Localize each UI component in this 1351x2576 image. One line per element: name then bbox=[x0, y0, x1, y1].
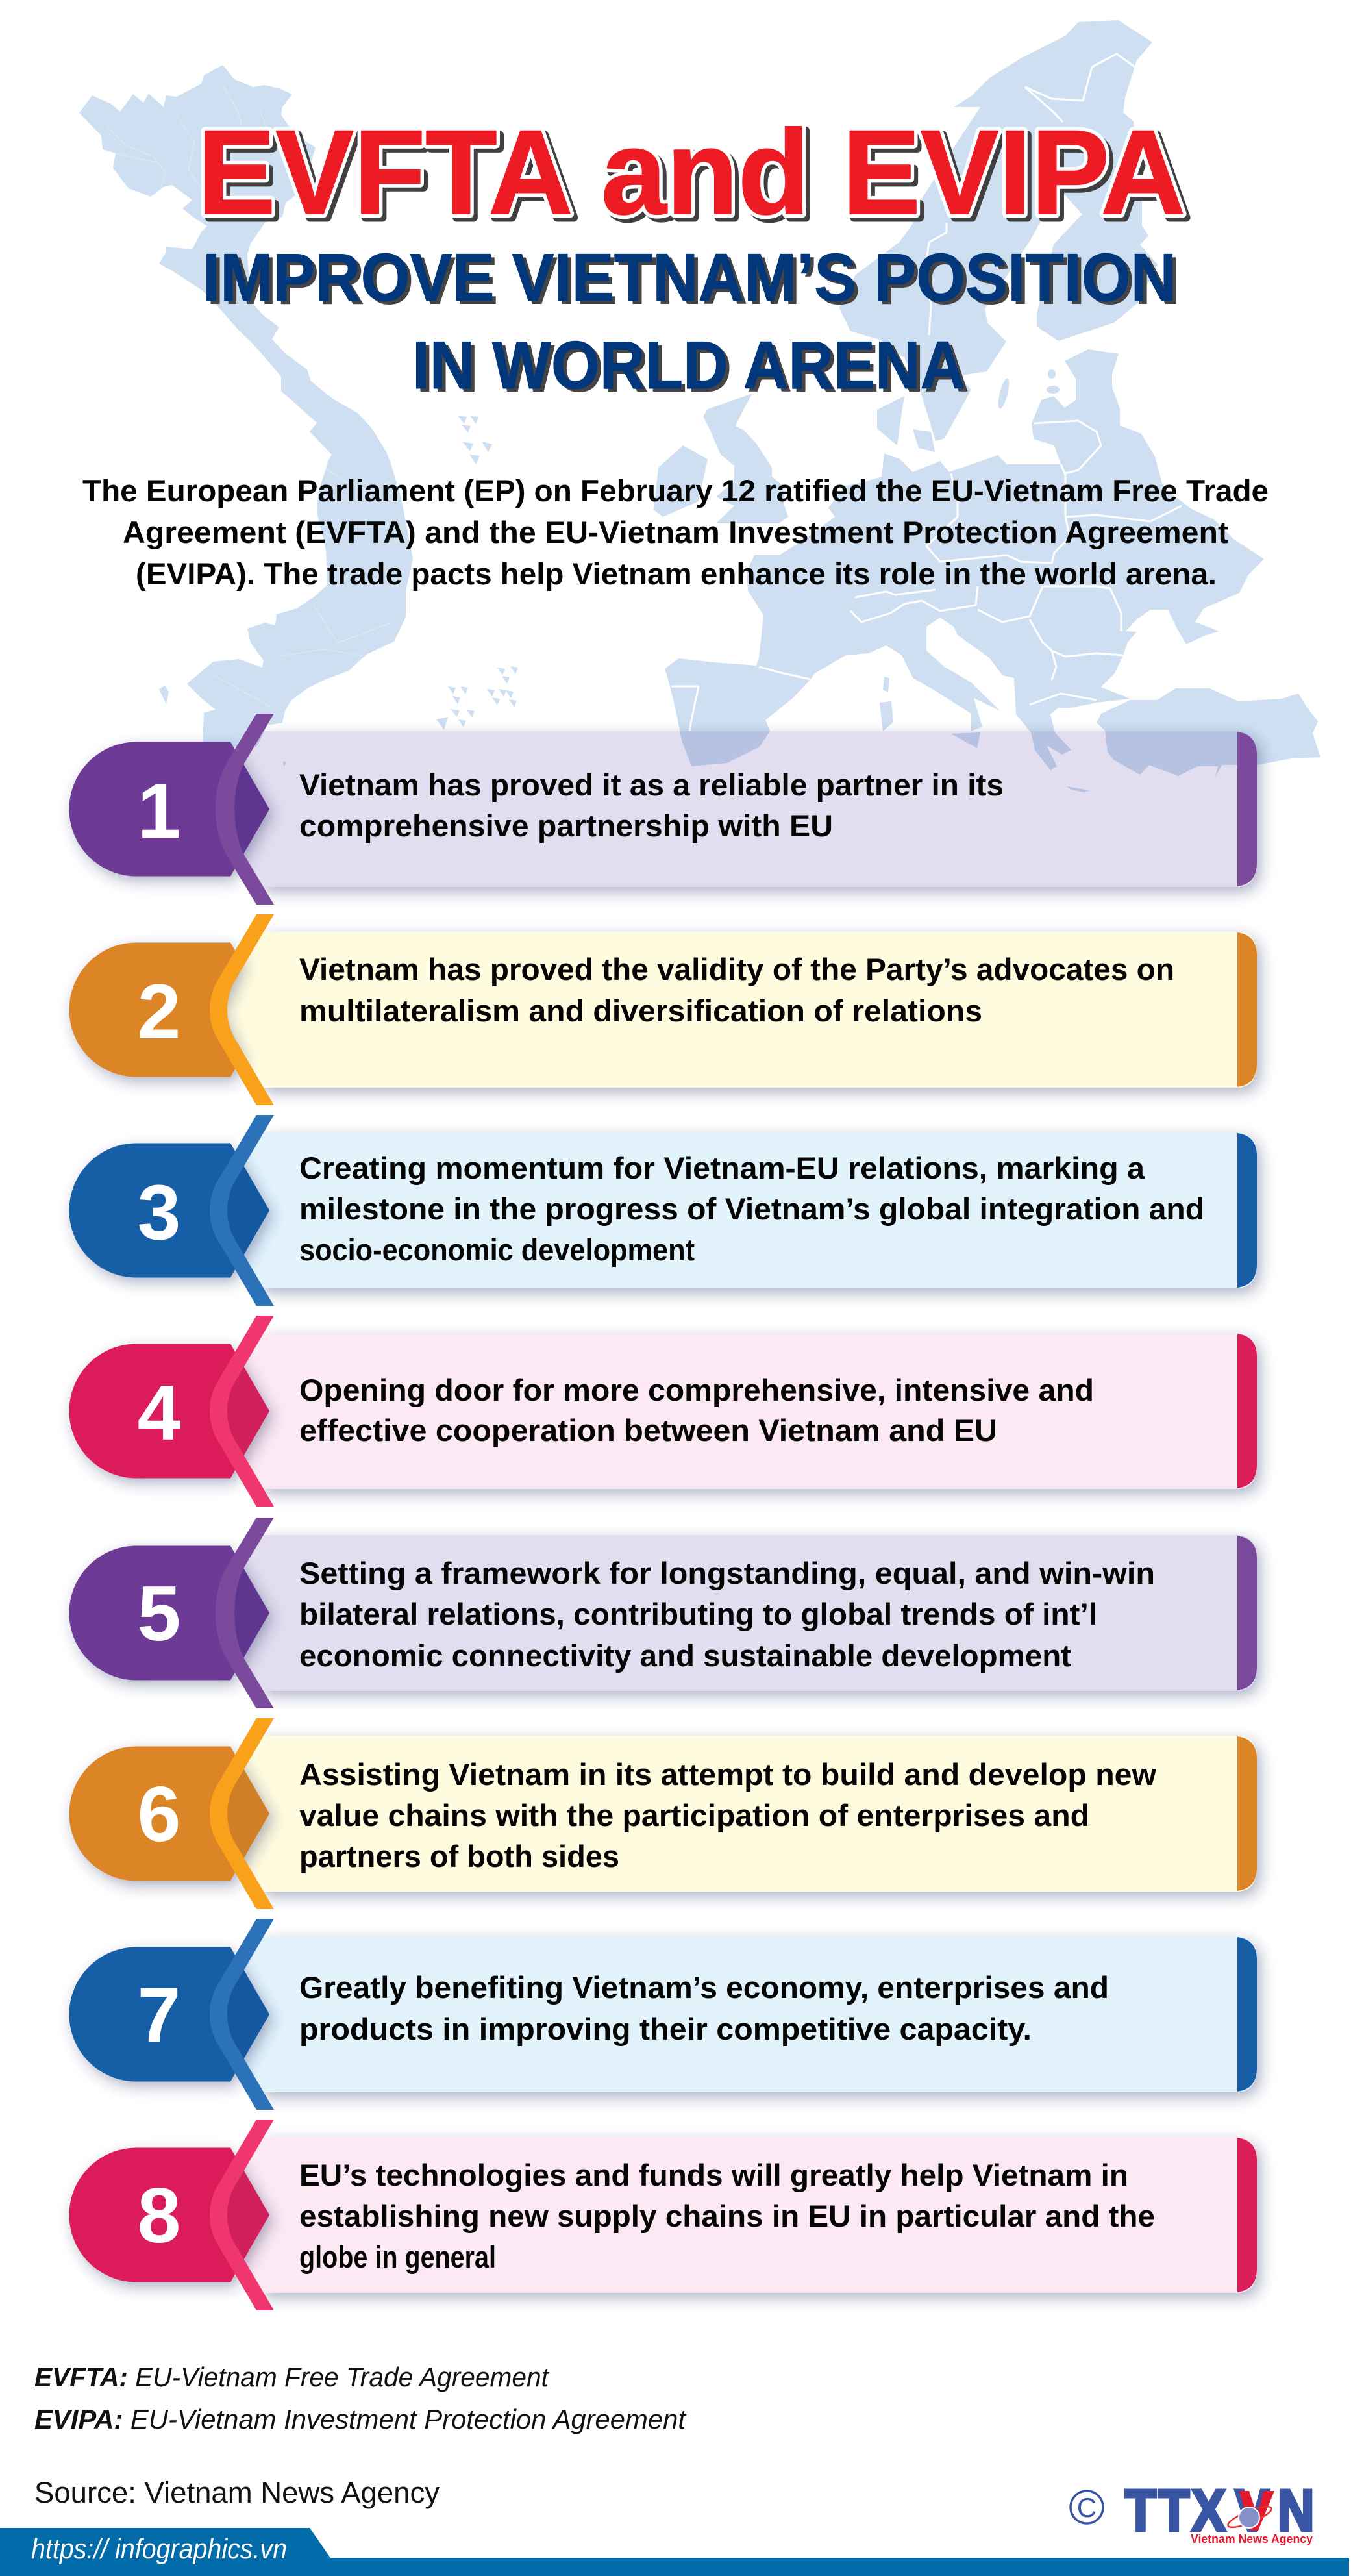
item 3 text: Creating momentum for Vietnam-EU relations, marking a bbox=[299, 1151, 1145, 1185]
subtitle: improve Vietnam's position in world arena: IN WORLD ARENA bbox=[412, 328, 965, 403]
item 3 text: milestone in the progress of Vietnam’s global integration and bbox=[299, 1192, 1204, 1226]
item 6 chevron bbox=[210, 1718, 274, 1909]
item 8 text: globe in general bbox=[299, 2240, 496, 2274]
item 7 bbox=[69, 1919, 1257, 2110]
item 7 text bbox=[299, 1970, 1109, 2046]
item 3 text bbox=[299, 1151, 1204, 1267]
item 1 text: comprehensive partnership with EU bbox=[299, 808, 833, 843]
item 3 text: socio-economic development bbox=[299, 1232, 695, 1267]
item 3 right accent bbox=[1237, 1133, 1257, 1288]
item 6 text bbox=[299, 1757, 1156, 1873]
item 4 bbox=[69, 1316, 1257, 1507]
subtitle: improve Vietnam's position in world arena bbox=[203, 240, 1180, 406]
abbreviations note bbox=[34, 2362, 687, 2434]
item 2 card bbox=[224, 932, 1257, 1088]
logo: copyright symbol bbox=[1071, 2491, 1103, 2523]
item 4 text bbox=[299, 1373, 1094, 1447]
item 1 number tab bbox=[69, 742, 269, 877]
intro paragraph: Agreement (EVFTA) and the EU-Vietnam Investment Protection Agreement bbox=[123, 515, 1228, 549]
item 3 chevron bbox=[210, 1115, 274, 1306]
item 8 number: 8 bbox=[138, 2172, 180, 2259]
item 7 text: products in improving their competitive capacity. bbox=[299, 2012, 1032, 2046]
map: Paracel and Spratly islands bbox=[436, 416, 518, 730]
item 6 card bbox=[232, 1736, 1257, 1892]
item 3 number: 3 bbox=[138, 1169, 180, 1256]
abbreviations note: EVFTA: EU-Vietnam Free Trade Agreement bbox=[34, 2362, 550, 2392]
item 1 card bbox=[232, 731, 1257, 887]
item 2 chevron bbox=[210, 914, 274, 1105]
item 5 chevron bbox=[216, 1518, 274, 1708]
item 2 bbox=[69, 914, 1257, 1105]
map: Con Dao islet bbox=[283, 761, 286, 767]
intro paragraph bbox=[82, 473, 1269, 591]
item 1 text: Vietnam has proved it as a reliable partner in its bbox=[299, 768, 1004, 802]
item 1 bbox=[69, 714, 1257, 905]
item 1 chevron bbox=[216, 714, 274, 905]
item 4 number: 4 bbox=[138, 1369, 181, 1457]
item 1 text bbox=[299, 768, 1004, 843]
title: EVFTA and EVIPA: EVFTA and EVIPA bbox=[197, 106, 1185, 240]
item 2 text: multilateralism and diversification of relations bbox=[299, 994, 982, 1028]
item 4 chevron bbox=[210, 1316, 274, 1507]
item 6 text: partners of both sides bbox=[299, 1839, 619, 1873]
intro paragraph: (EVIPA). The trade pacts help Vietnam enhance its role in the world arena. bbox=[136, 556, 1217, 591]
item 8 text bbox=[299, 2158, 1155, 2274]
item 5 card bbox=[232, 1535, 1257, 1691]
item 6 number tab bbox=[69, 1747, 269, 1881]
item 2 text bbox=[299, 952, 1174, 1028]
item 7 chevron bbox=[210, 1919, 274, 2110]
background map: Vietnam and Europe bbox=[79, 20, 1320, 792]
map: Turkey and Crete bbox=[1067, 688, 1320, 792]
item 5 text: economic connectivity and sustainable development bbox=[299, 1638, 1071, 1673]
item 1 right accent bbox=[1237, 732, 1257, 886]
logo: TTXVN Vietnam News Agency: Vietnam News Agency bbox=[1191, 2532, 1313, 2545]
item 5 text: bilateral relations, contributing to global trends of int’l bbox=[299, 1597, 1097, 1631]
item 7 card bbox=[232, 1936, 1257, 2092]
item 7 text: Greatly benefiting Vietnam’s economy, enterprises and bbox=[299, 1970, 1109, 2005]
map: Scandinavia and Finland bbox=[839, 20, 1158, 441]
item 8 text: EU’s technologies and funds will greatly help Vietnam in bbox=[299, 2158, 1128, 2192]
item 4 text: effective cooperation between Vietnam and EU bbox=[299, 1413, 997, 1447]
item 8 tab tip bbox=[221, 2164, 269, 2266]
item 8 chevron bbox=[210, 2120, 274, 2310]
subtitle: improve Vietnam's position in world arena: IMPROVE VIETNAM’S POSITION bbox=[206, 244, 1180, 319]
subtitle: improve Vietnam's position in world arena: IMPROVE VIETNAM’S POSITION bbox=[203, 240, 1176, 316]
item 8 bbox=[69, 2120, 1257, 2310]
item 3 tab tip bbox=[221, 1160, 269, 1261]
item 6 bbox=[69, 1718, 1257, 1909]
logo: TTXVN Vietnam News Agency: TTXVN bbox=[1125, 2478, 1314, 2543]
title: EVFTA and EVIPA: EVFTA and EVIPA bbox=[201, 110, 1189, 244]
item 5 text: Setting a framework for longstanding, equal, and win-win bbox=[299, 1556, 1155, 1590]
map: Denmark bbox=[877, 396, 935, 452]
footer bar with URL bbox=[0, 2528, 1349, 2576]
item 3 number tab bbox=[69, 1143, 269, 1278]
title: EVFTA and EVIPA: EVFTA and EVIPA bbox=[197, 106, 1185, 240]
item 4 text: Opening door for more comprehensive, intensive and bbox=[299, 1373, 1094, 1407]
map: Britain and Ireland bbox=[654, 394, 788, 523]
item 8 text: establishing new supply chains in EU in particular and the bbox=[299, 2199, 1155, 2233]
item 6 number: 6 bbox=[138, 1771, 180, 1858]
item 8 number tab bbox=[69, 2148, 269, 2282]
item 8 card bbox=[232, 2137, 1257, 2293]
item 3 card bbox=[232, 1132, 1257, 1288]
item 7 tab tip bbox=[221, 1964, 269, 2065]
item 4 card bbox=[232, 1333, 1257, 1489]
item 5 number tab bbox=[69, 1545, 269, 1681]
footer bar with URL: https:// infographics.vn bbox=[31, 2533, 287, 2565]
item 6 right accent bbox=[1237, 1736, 1257, 1891]
item 7 number tab bbox=[69, 1947, 269, 2082]
item 5 number: 5 bbox=[138, 1570, 180, 1657]
item 7 right accent bbox=[1237, 1937, 1257, 2092]
item 2 number tab bbox=[69, 943, 242, 1077]
item 5 text bbox=[299, 1556, 1155, 1673]
item 1 number: 1 bbox=[138, 768, 180, 855]
item 5 tab tip bbox=[221, 1562, 269, 1664]
item 3 bbox=[69, 1115, 1257, 1306]
item 4 number tab bbox=[69, 1344, 269, 1478]
item 2 right accent bbox=[1237, 932, 1257, 1087]
item 6 text: value chains with the participation of enterprises and bbox=[299, 1798, 1089, 1832]
logo: copyright symbol: C bbox=[1077, 2492, 1097, 2523]
item 4 tab tip bbox=[221, 1360, 269, 1462]
item 5 right accent bbox=[1237, 1536, 1257, 1690]
item 6 tab tip bbox=[221, 1763, 269, 1864]
item 4 right accent bbox=[1237, 1334, 1257, 1488]
item 8 right accent bbox=[1237, 2138, 1257, 2292]
map: Vietnam bbox=[79, 65, 413, 747]
subtitle: improve Vietnam's position in world arena: IN WORLD ARENA bbox=[416, 331, 969, 406]
item 5 bbox=[69, 1518, 1257, 1708]
source line: Source: Vietnam News Agency bbox=[34, 2476, 440, 2509]
item 6 text: Assisting Vietnam in its attempt to build and develop new bbox=[299, 1757, 1156, 1792]
item 2 text: Vietnam has proved the validity of the Party’s advocates on bbox=[299, 952, 1174, 986]
abbreviations note: EVIPA: EU-Vietnam Investment Protection Agreement bbox=[34, 2404, 687, 2434]
map: continental Europe bbox=[665, 349, 1264, 770]
item 1 tab tip bbox=[221, 758, 269, 860]
item 7 number: 7 bbox=[138, 1971, 180, 2058]
intro paragraph: The European Parliament (EP) on February 12 ratified the EU-Vietnam Free Trade bbox=[82, 473, 1269, 508]
item 2 number: 2 bbox=[138, 968, 180, 1055]
